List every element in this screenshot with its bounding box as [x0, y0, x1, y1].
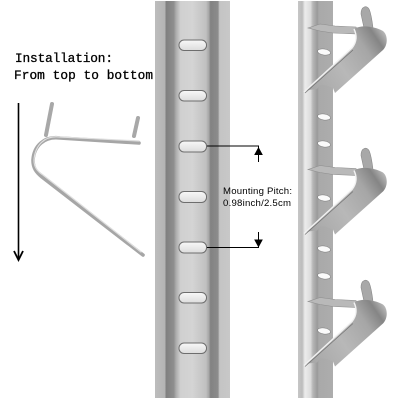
heading: installation direction: Installation: [15, 51, 113, 66]
arrow: top to bottom [14, 103, 23, 260]
label: mounting pitch [223, 186, 292, 209]
callout: lower pitch marker [207, 232, 262, 248]
panel: side view of rail with clips [298, 1, 387, 398]
label: mounting pitch: Mounting Pitch: [223, 186, 292, 197]
slots [179, 40, 206, 354]
rail body [155, 1, 230, 398]
label: mounting pitch: 0.98inch/2.5cm [223, 198, 291, 209]
icon: clip side profile [33, 104, 143, 255]
heading: installation direction: From top to bottom [14, 68, 153, 83]
rail body [298, 1, 333, 398]
clip: middle [304, 148, 387, 234]
clip: bottom [304, 280, 387, 366]
slots [317, 48, 331, 335]
callout: upper pitch marker [207, 146, 262, 162]
panel: front view of mounting rail [155, 1, 230, 398]
clip: top [304, 7, 387, 93]
heading: installation direction [14, 51, 153, 83]
